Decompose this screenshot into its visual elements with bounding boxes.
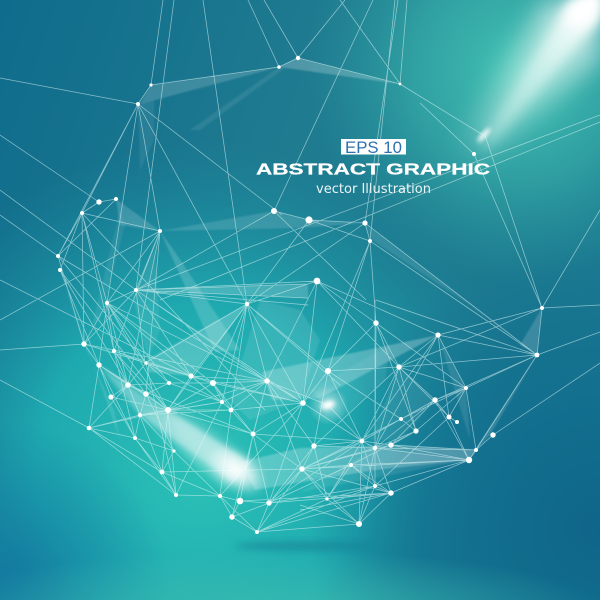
title: ABSTRACT GRAPHIC bbox=[256, 162, 490, 178]
bright light glows bbox=[157, 127, 492, 506]
ground shadow bbox=[235, 541, 375, 551]
bright diagonal band bbox=[99, 365, 250, 490]
EPS 10 badge: EPS 10 bbox=[345, 138, 402, 157]
subtitle: vector Illustration bbox=[316, 182, 431, 197]
network nodes bbox=[56, 56, 544, 534]
light beam top right bbox=[455, 0, 600, 165]
translucent facets bbox=[60, 58, 542, 492]
